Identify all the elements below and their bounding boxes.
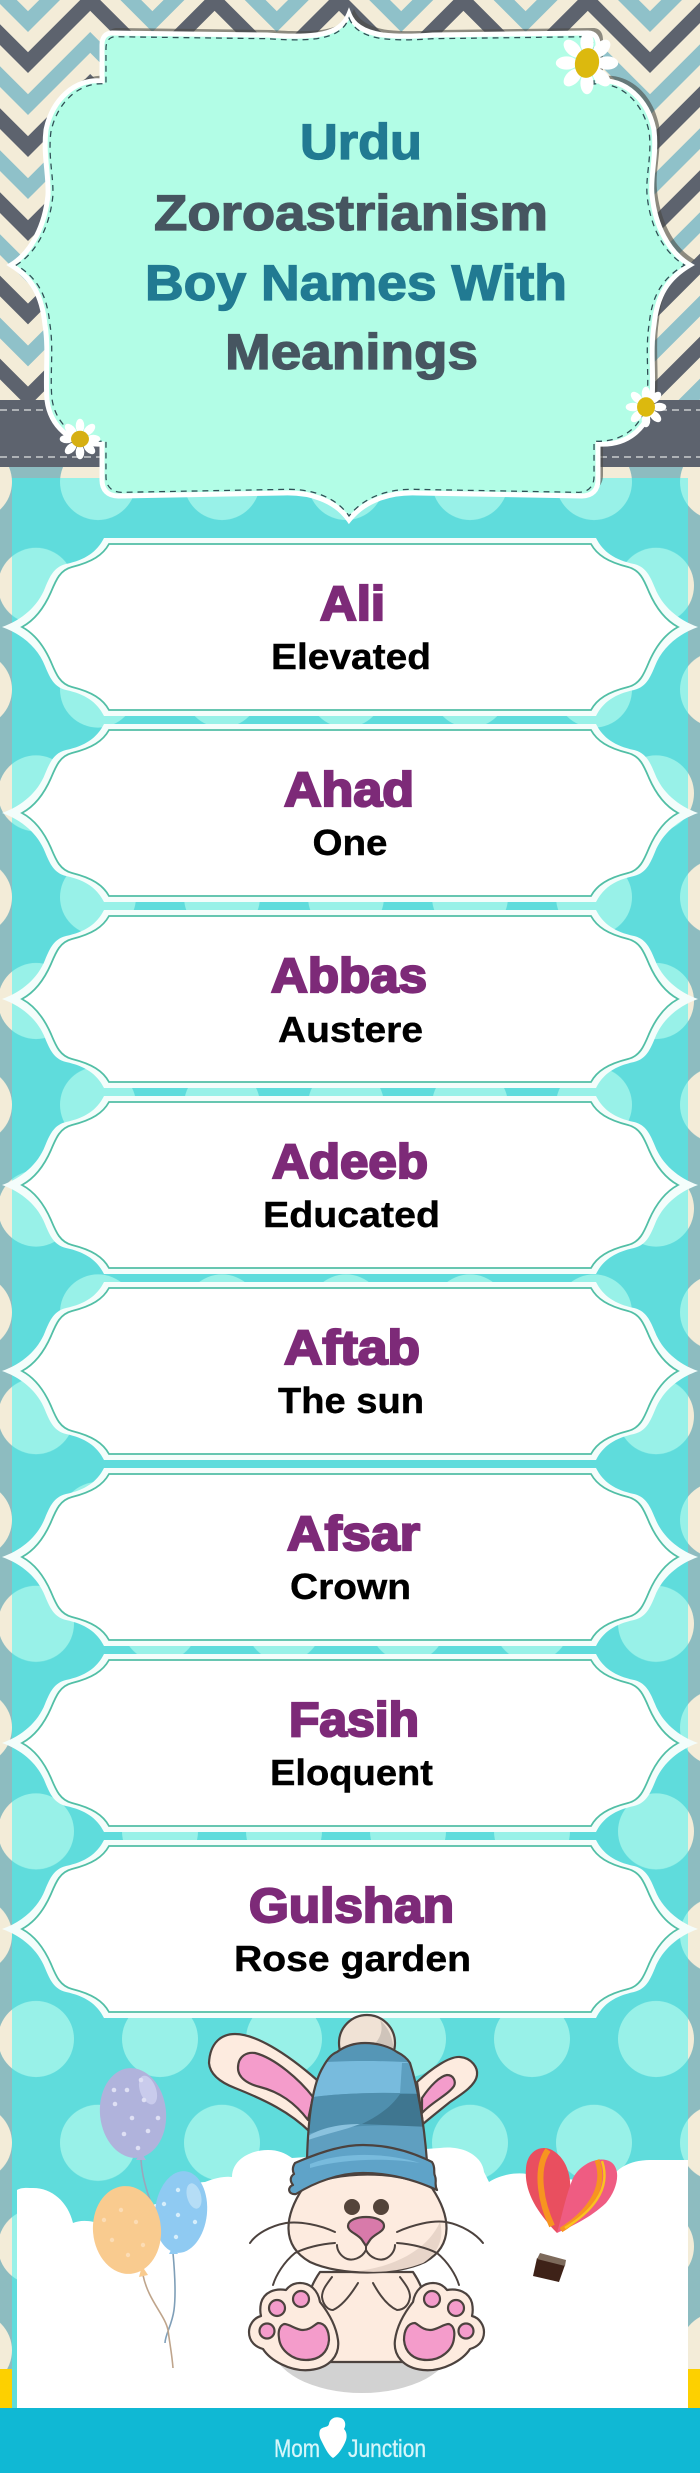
- name card: Adeeb: [2, 1096, 698, 1274]
- right foot: [395, 2283, 484, 2370]
- name card: Ahad: Ahad: [284, 764, 414, 817]
- name card: Afsar: [2, 1468, 698, 1646]
- name card: Ali: Ali: [320, 578, 385, 631]
- body: [304, 2272, 429, 2362]
- icon: basket: [533, 2253, 566, 2282]
- title: Zoroastrianism: [154, 185, 548, 241]
- name card: Abbas: Austere: [278, 1009, 423, 1050]
- name card: Abbas: [2, 910, 698, 1088]
- icon: daisy bottom right: [626, 387, 666, 427]
- orange balloon: [89, 2183, 165, 2277]
- title: Meanings: [225, 324, 478, 380]
- logo: MomJunction: Junction: [348, 2435, 426, 2463]
- blue balloon: [151, 2169, 211, 2255]
- purple balloon: [95, 2065, 171, 2161]
- head: [288, 2174, 447, 2272]
- name card: Fasih: [2, 1654, 698, 1832]
- name card: Ali: Elevated: [271, 636, 431, 677]
- icon: mother and child: [319, 2417, 347, 2458]
- icon: daisy top right: [556, 32, 618, 94]
- arms: [322, 2277, 410, 2310]
- name card: Gulshan: [2, 1840, 698, 2018]
- pompom: [339, 2015, 395, 2071]
- face: [250, 2199, 483, 2285]
- left ear: [209, 2034, 317, 2132]
- name card: Adeeb: Educated: [263, 1194, 440, 1235]
- name card: Fasih: Fasih: [289, 1694, 419, 1747]
- shadow: [272, 2297, 452, 2393]
- name card: Abbas: Abbas: [271, 950, 427, 1003]
- logo: MomJunction: [274, 2417, 426, 2463]
- logo: MomJunction: Mom: [274, 2435, 320, 2463]
- name card: Ahad: [2, 724, 698, 902]
- name card: Afsar: Afsar: [287, 1508, 420, 1561]
- icon: daisy bottom left: [60, 419, 100, 459]
- footer bar: [0, 2408, 700, 2473]
- name card: Gulshan: Gulshan: [249, 1880, 454, 1933]
- name card: Afsar: Crown: [290, 1566, 411, 1607]
- background: chevron pattern: [0, 0, 700, 439]
- name card: Aftab: Aftab: [284, 1322, 420, 1375]
- illustration: bunny in a hat: [209, 2015, 484, 2393]
- grey stitched band: [0, 400, 700, 467]
- title: Boy Names With: [145, 255, 567, 311]
- left foot: [249, 2283, 338, 2370]
- hat brim: [289, 2145, 437, 2194]
- icon: balloons: [89, 2065, 211, 2368]
- name card: Gulshan: Rose garden: [234, 1938, 471, 1979]
- name card: Ahad: One: [312, 822, 388, 863]
- name card: Aftab: [2, 1282, 698, 1460]
- name card: Ali: [2, 538, 698, 716]
- name card: Aftab: The sun: [278, 1380, 424, 1421]
- title: Urdu: [300, 114, 422, 170]
- name card: Adeeb: Adeeb: [272, 1136, 428, 1189]
- name card: Fasih: Eloquent: [270, 1752, 433, 1793]
- hat: [306, 2042, 428, 2159]
- white cloud: [17, 2147, 688, 2408]
- icon: heart hot-air balloon: [526, 2148, 617, 2233]
- right ear: [417, 2057, 477, 2124]
- panel: title plaque: [11, 9, 695, 520]
- title: [145, 114, 567, 380]
